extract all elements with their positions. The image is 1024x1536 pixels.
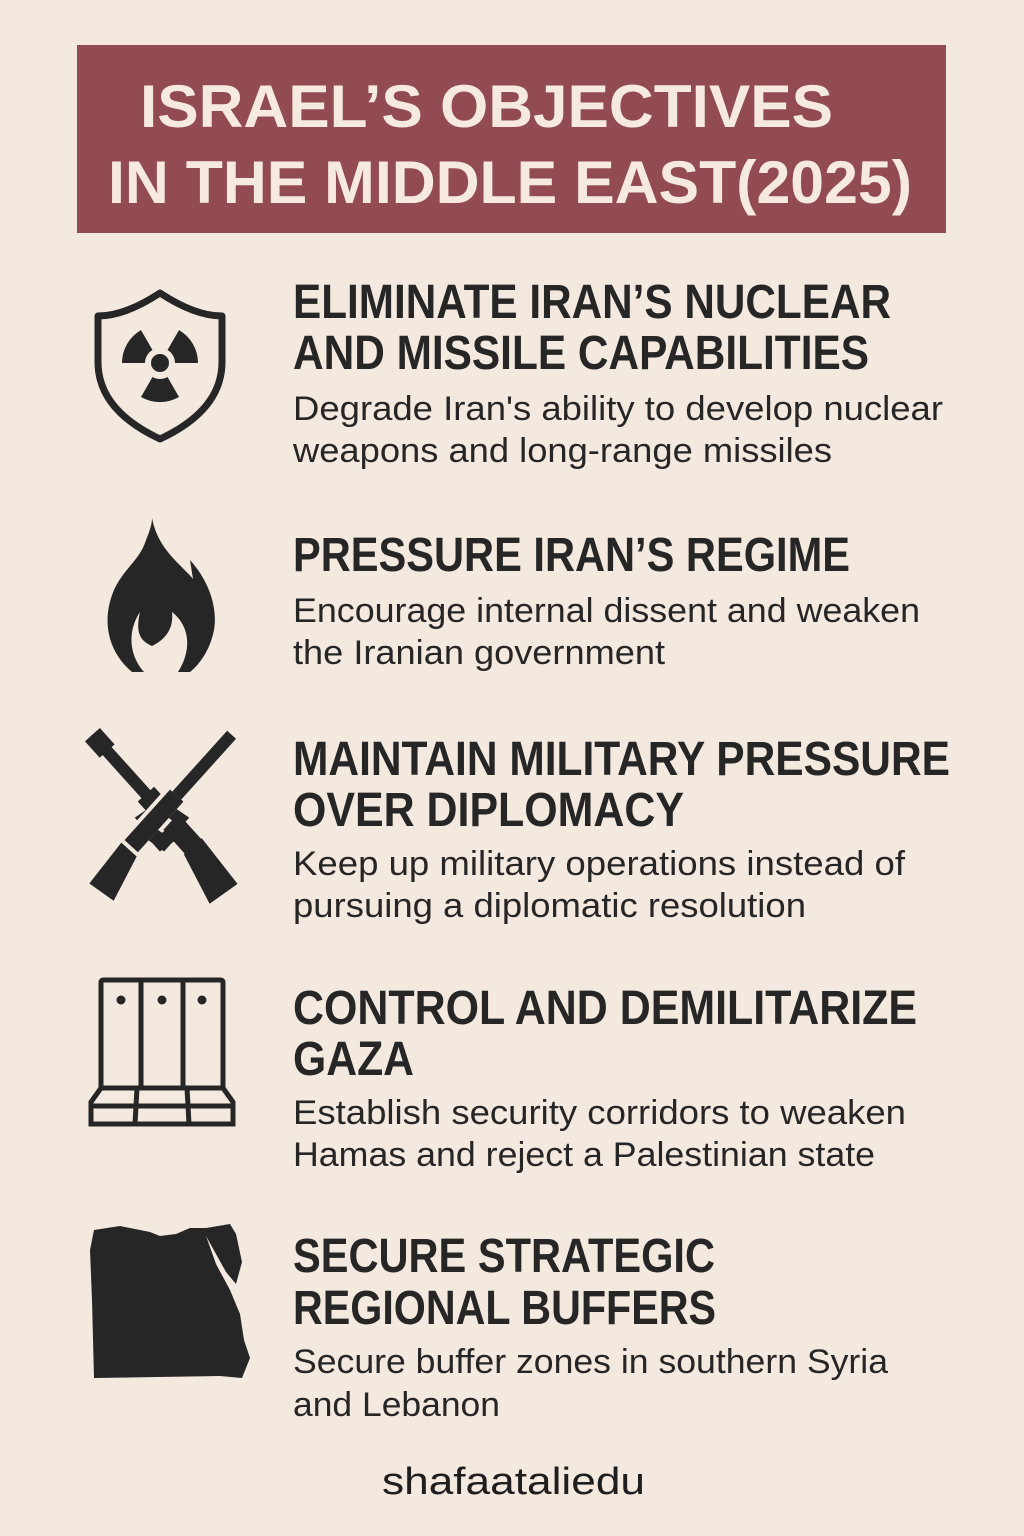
- section 1 text: ELIMINATE IRAN’S NUCLEAR: [293, 276, 891, 329]
- section 4 text: Hamas and reject a Palestinian state: [293, 1136, 875, 1174]
- section 5 text: REGIONAL BUFFERS: [293, 1282, 716, 1335]
- section 1 text: Degrade Iran's ability to develop nuclear: [293, 390, 943, 428]
- section 3 text: MAINTAIN MILITARY PRESSURE: [293, 733, 950, 786]
- icon: flame: [108, 518, 215, 672]
- section 3 text: [293, 733, 950, 925]
- section 3 text: Keep up military operations instead of: [293, 845, 906, 883]
- icon: Egypt map silhouette: [90, 1224, 250, 1378]
- section 4 text: [293, 982, 917, 1174]
- section 2 text: [293, 529, 920, 672]
- section 4 text: Establish security corridors to weaken: [293, 1094, 906, 1132]
- section 1 text: AND MISSILE CAPABILITIES: [293, 327, 869, 380]
- section 3 text: OVER DIPLOMACY: [293, 784, 684, 837]
- section 5 text: Secure buffer zones in southern Syria: [293, 1343, 888, 1381]
- section 4 text: CONTROL AND DEMILITARIZE: [293, 982, 917, 1035]
- section 3 text: pursuing a diplomatic resolution: [293, 887, 806, 925]
- footer credit: shafaataliedu: [382, 1461, 645, 1503]
- section 5 text: SECURE STRATEGIC: [293, 1230, 715, 1283]
- title banner: ISRAEL’S OBJECTIVES: [140, 73, 833, 140]
- section 2 text: PRESSURE IRAN’S REGIME: [293, 529, 850, 582]
- icon: crossed rifles: [72, 727, 252, 908]
- section 1 text: [292, 276, 943, 470]
- section 5 text: [293, 1230, 888, 1424]
- section 1 text: weapons and long-range missiles: [292, 432, 832, 470]
- section 5 text: and Lebanon: [293, 1386, 500, 1424]
- title banner: IN THE MIDDLE EAST(2025): [108, 149, 912, 216]
- icon: security barrier: [91, 980, 233, 1124]
- icon: radiation shield: [98, 293, 222, 439]
- section 2 text: Encourage internal dissent and weaken: [293, 592, 920, 630]
- section 4 text: GAZA: [293, 1033, 414, 1086]
- title banner: [77, 45, 946, 233]
- section 2 text: the Iranian government: [293, 634, 666, 672]
